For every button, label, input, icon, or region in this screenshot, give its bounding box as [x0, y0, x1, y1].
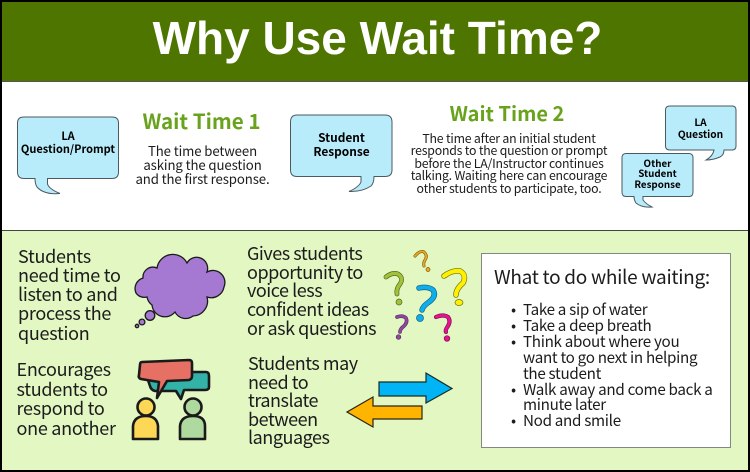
label: Student Response: Student: [318, 129, 365, 146]
bullet list: the student: [523, 362, 601, 384]
bullet list: [511, 298, 713, 431]
text: Wait Time 1 definition: The time between: [148, 141, 257, 160]
panel: reasons: [2, 231, 748, 470]
text: Wait Time 1 definition: [135, 141, 270, 188]
label: Student Response: [313, 129, 370, 160]
text: Wait Time 1 definition: and the first response.: [135, 169, 270, 188]
text: voice ideas: or ask questions: [247, 315, 376, 341]
icon: two people talking: [133, 360, 209, 439]
text: Wait Time 2 definition: before the LA/Instructor continues: [414, 154, 604, 172]
label: Other Student Response: [634, 156, 681, 191]
text: translate languages: between: [248, 406, 318, 432]
text: respond to one another: [16, 356, 116, 441]
text: Wait Time 1 definition: asking the question: [143, 155, 262, 174]
bullet list: •: [511, 298, 516, 320]
text: time to process: [18, 242, 121, 346]
label: Other Student Response: Student: [638, 166, 677, 180]
bullet list: want to go next in helping: [523, 346, 697, 368]
text: time to process: question: [18, 320, 89, 346]
heading: Wait Time 1: Wait Time 1: [142, 105, 261, 135]
text: voice ideas: [247, 240, 376, 341]
heading: Wait Time 2: Wait Time 2: [450, 98, 564, 127]
text: time to process: need time to: [18, 262, 121, 288]
text: voice ideas: voice less: [247, 277, 322, 303]
text: voice ideas: confident ideas: [247, 296, 369, 322]
label: LA Question/Prompt: LA: [61, 128, 75, 144]
icon: student response bubble: [290, 115, 392, 192]
text: respond to one another: students to: [16, 376, 108, 402]
title: Why Use Wait Time?: [153, 12, 602, 64]
label: LA Question: Question: [678, 126, 723, 141]
text: translate languages: translate: [248, 387, 318, 413]
bullet list: Take a deep breath: [523, 314, 651, 336]
heading: what to do: What to do while waiting:: [494, 263, 710, 290]
text: respond to one another: one another: [16, 415, 116, 441]
label: LA Question/Prompt: Question/Prompt: [21, 141, 115, 157]
text: respond to one another: Encourages: [16, 356, 111, 382]
text: Wait Time 2 definition: The time after an initial student: [422, 128, 596, 146]
text: voice ideas: Gives students: [247, 240, 362, 266]
bullet list: •: [511, 314, 516, 336]
bullet list: Nod and smile: [523, 409, 621, 431]
text: Wait Time 2 definition: responds to the question or prompt: [411, 141, 607, 159]
panel: definitions: [2, 82, 748, 231]
icon: thought cloud: [135, 254, 225, 328]
title banner: [2, 2, 748, 82]
icon: LA question small bubble: [666, 106, 736, 160]
text: translate languages: Students may: [248, 350, 358, 376]
bullet list: •: [511, 409, 516, 431]
label: Other Student Response: Response: [634, 177, 681, 191]
text: Wait Time 2 definition: [411, 128, 608, 196]
bullet list: Take a sip of water: [523, 298, 647, 320]
bullet list: Walk away and come back a: [523, 378, 713, 400]
panel: what to do while waiting: [481, 253, 731, 448]
bullet list: •: [511, 378, 516, 400]
icon: question marks: [386, 252, 464, 341]
text: time to process: Students: [18, 242, 91, 268]
text: translate languages: languages: [248, 424, 330, 450]
label: LA Question/Prompt: [21, 128, 115, 157]
label: Other Student Response: Other: [644, 156, 671, 170]
text: voice ideas: opportunity to: [247, 259, 363, 285]
label: LA Question: [678, 114, 723, 141]
text: translate languages: need to: [248, 368, 308, 394]
label: LA Question: LA: [694, 114, 707, 128]
bullet list: minute later: [523, 393, 606, 415]
text: time to process: listen to and: [18, 281, 118, 307]
icon: LA question bubble: [18, 117, 118, 194]
bullet list: •: [511, 330, 516, 352]
text: Wait Time 2 definition: other students to participate, too.: [417, 178, 601, 196]
icon: blue arrow right: [379, 373, 452, 403]
text: translate languages: [248, 350, 358, 450]
text: Wait Time 2 definition: talking. Waiting here can encourage: [411, 166, 607, 184]
icon: other student response bubble: [622, 154, 693, 207]
icon: orange arrow left: [347, 397, 422, 427]
text: respond to one another: respond to: [16, 395, 105, 421]
bullet list: Think about where you: [523, 330, 679, 352]
text: time to process: process the: [18, 300, 111, 326]
label: Student Response: Response: [313, 142, 370, 160]
